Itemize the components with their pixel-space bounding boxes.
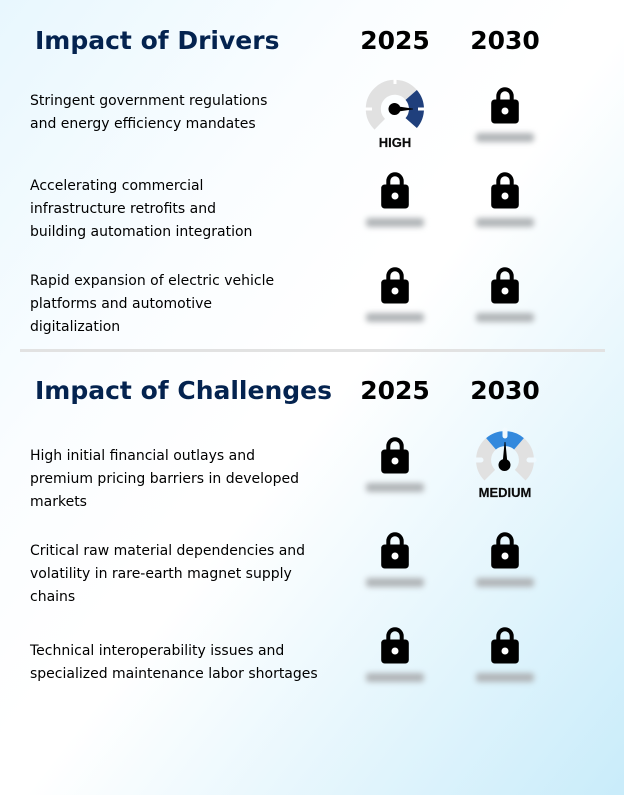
text: driver 1: [30, 93, 267, 132]
lock: driver 2 2030: [473, 172, 537, 230]
text: driver 2: Accelerating commercial: [30, 178, 203, 194]
text: challenge 1: markets: [30, 494, 87, 510]
text: driver 1: Stringent government regulations: [30, 93, 267, 109]
lock: challenge 3 2025: [363, 627, 427, 686]
lock: driver 2 2025: [363, 172, 427, 230]
lock: driver 3 2025: [363, 267, 427, 326]
year label: drivers 2025: 2025: [360, 26, 430, 55]
text: driver 2: infrastructure retrofits and: [30, 201, 216, 217]
text: challenge 1: [30, 448, 299, 510]
heading: impact of challenges: Impact of Challenges: [35, 376, 332, 405]
year label: drivers 2030: 2030: [470, 26, 540, 55]
heading: impact of drivers: Impact of Drivers: [35, 26, 279, 55]
text: challenge 3: specialized maintenance labor shortages: [30, 666, 318, 682]
lock: driver 1 2030: [473, 87, 537, 146]
text: driver 3: platforms and automotive: [30, 296, 212, 312]
lock: challenge 1 2025: [363, 437, 427, 496]
text: challenge 1: premium pricing barriers in developed: [30, 471, 299, 487]
lock: challenge 3 2030: [473, 627, 537, 686]
text: challenge 2: volatility in rare-earth magnet supply: [30, 566, 292, 582]
text: challenge 3: [30, 643, 318, 682]
text: driver 3: [30, 273, 274, 335]
lock: challenge 2 2025: [363, 532, 427, 590]
text: driver 1: and energy efficiency mandates: [30, 116, 256, 132]
text: driver 3: digitalization: [30, 319, 120, 335]
text: driver 2: building automation integration: [30, 224, 252, 240]
lock: driver 3 2030: [473, 267, 537, 326]
gauge: driver 1 2025 high: [366, 80, 424, 150]
text: challenge 3: Technical interoperability issues and: [30, 643, 284, 659]
gauge: challenge 1 2030 medium: [476, 431, 534, 500]
gauge: driver 1 2025 high: HIGH: [379, 135, 411, 150]
gauge: challenge 1 2030 medium: MEDIUM: [479, 485, 531, 500]
text: challenge 2: chains: [30, 589, 75, 605]
text: challenge 2: Critical raw material dependencies and: [30, 543, 305, 559]
lock: challenge 2 2030: [473, 532, 537, 590]
year label: challenges 2030: 2030: [470, 376, 540, 405]
text: challenge 2: [30, 543, 305, 605]
year label: challenges 2025: 2025: [360, 376, 430, 405]
text: driver 2: [30, 178, 252, 240]
text: driver 3: Rapid expansion of electric vehicle: [30, 273, 274, 289]
text: challenge 1: High initial financial outlays and: [30, 448, 255, 464]
